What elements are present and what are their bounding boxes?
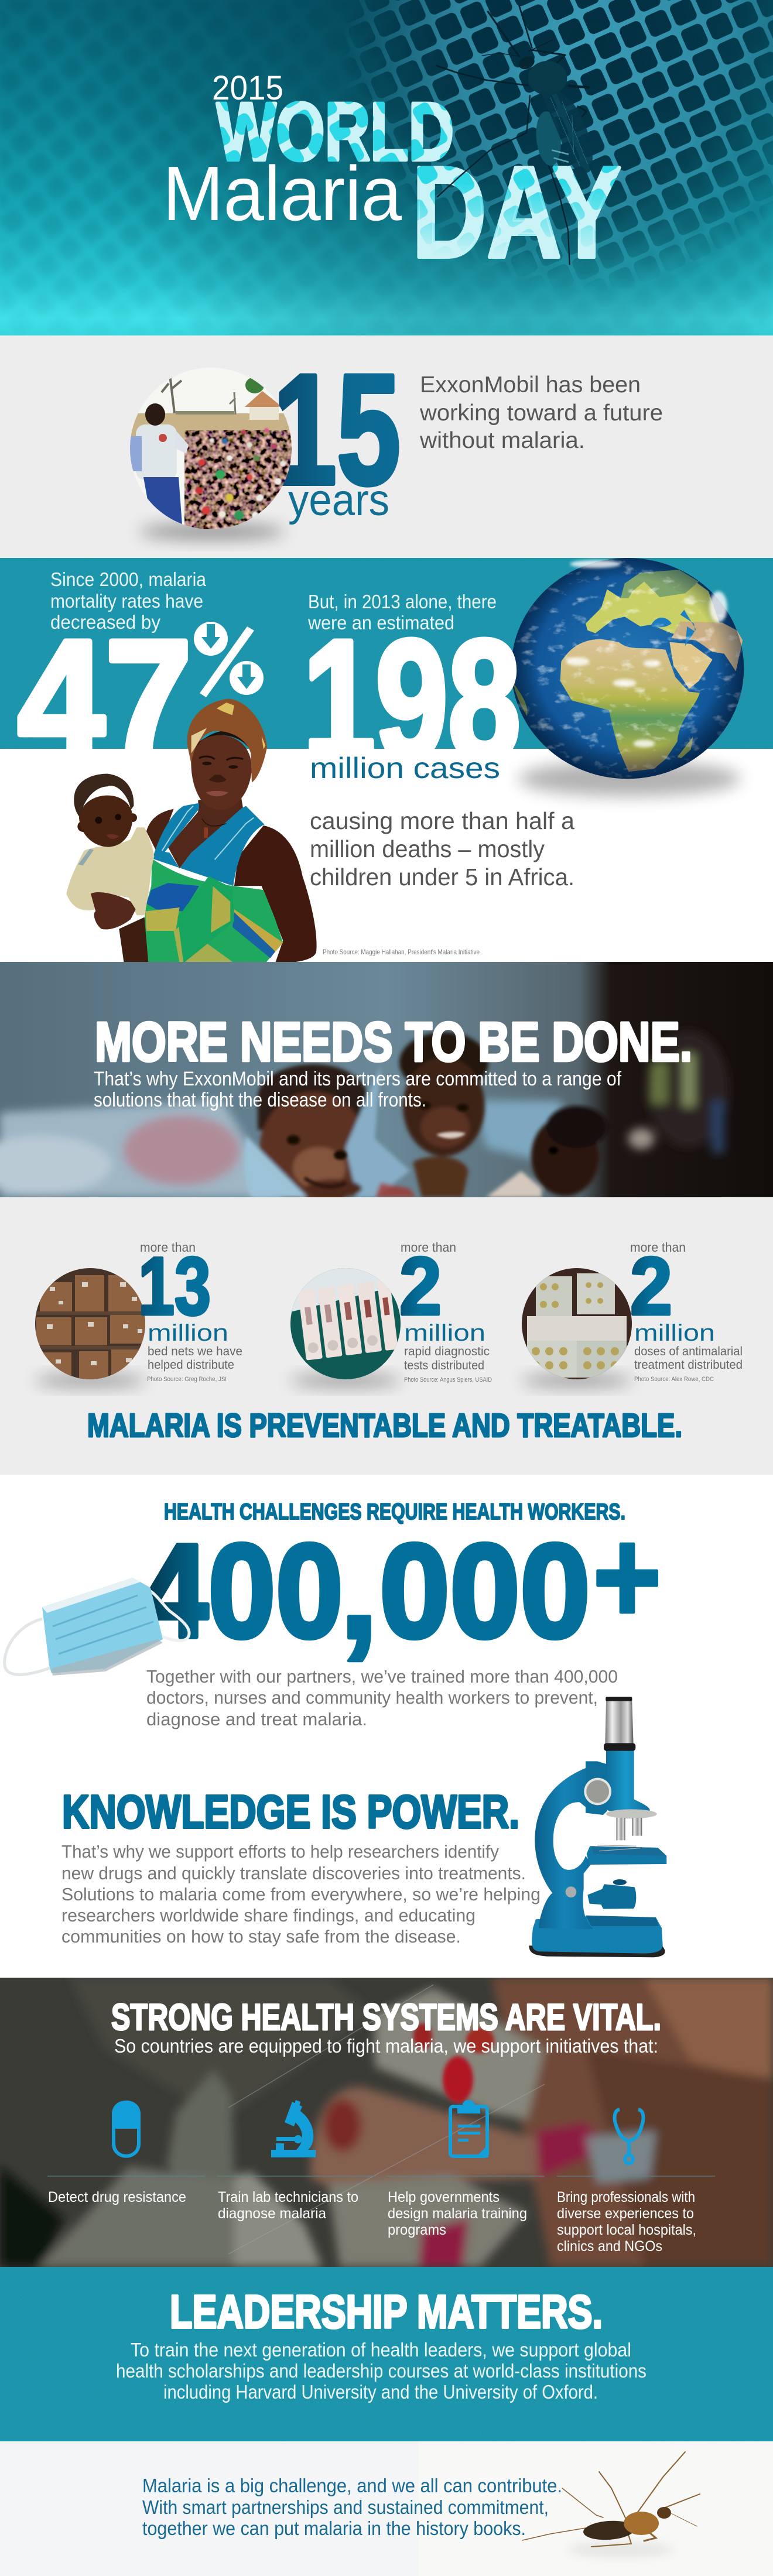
text: trained [146,1666,618,1729]
text: train lab technicians [218,2189,358,2222]
text: commitment: solutions that fight the disease on all fronts. [94,1089,426,1111]
icon: microscope [271,2100,316,2157]
label: years: years [288,475,389,525]
text: closing [142,2475,562,2539]
panel: closing message [0,2441,773,2576]
panel: more needs to be done photo [0,962,773,1209]
heading: DAY [417,166,621,259]
heading: LEADERSHIP MATTERS. [170,2286,603,2338]
panel: health workers and knowledge [0,1475,773,1978]
text: intro: working toward a future [419,400,663,426]
caption: Photo Source: Alex Rowe, CDC [634,1376,714,1383]
text: estimated: were an estimated [307,612,454,633]
number: 198: 198 [303,605,521,794]
panel: distribution stats [0,1197,773,1475]
number: 47 percent: 47 [18,605,192,794]
photo: test strips [290,1268,401,1380]
text: commitment [94,1068,621,1111]
illustration: mosquito on net [436,6,593,265]
text: mortality: decreased by [50,611,160,633]
panel: leadership matters [0,2267,773,2441]
label: million cases: million cases [310,752,500,785]
text: estimated: But, in 2013 alone, there [308,591,497,612]
number: 15: 15 [273,341,401,517]
caption: photo source: Photo Source: Maggie Hallahan, President's Malaria Initiative [323,948,480,956]
text: train lab technicians: diagnose malaria [218,2205,326,2222]
label: more than: more than [401,1240,456,1255]
icon: percent sign with down arrows [194,622,264,697]
text: trained: doctors, nurses and community health workers to prevent, [146,1687,598,1708]
number: 2: 2 [399,1240,442,1332]
text: tests [404,1345,490,1372]
text: deaths [310,807,574,890]
text: bed nets: bed nets we have [148,1345,242,1358]
text: research: That’s why we support efforts to help researchers identify [61,1841,499,1862]
label: more than: more than [140,1240,196,1255]
text: bring professionals [557,2189,696,2255]
heading: knowledge: KNOWLEDGE IS POWER. [62,1786,519,1838]
text: subtitle: So countries are equipped to fight malaria, we support initiatives that: [114,2035,658,2057]
text: detect drug resistance: Detect drug resistance [48,2189,186,2205]
number: 400,000+: , [338,1506,379,1669]
heading: health workers: HEALTH CHALLENGES REQUIRE HEALTH WORKERS. [164,1499,625,1525]
number: 2: 2 [630,1240,672,1332]
text: trained: diagnose and treat malaria. [146,1709,367,1729]
label: more than: more than [630,1240,686,1255]
number: 400,000+: + [593,1501,662,1652]
text: deaths: causing more than half a [310,807,574,834]
heading: DAY: DAY [412,140,621,285]
heading: WORLD: WORLD [217,85,454,177]
icon: stethoscope [615,2109,643,2163]
text: scholarships: including Harvard University and the University of Oxford. [163,2381,598,2403]
panel: hero banner [0,0,773,335]
text: intro: without malaria. [419,428,585,453]
photo: medicine packs [521,1268,632,1380]
text: intro: ExxonMobil has been [420,372,641,398]
text: closing: With smart partnerships and sustained commitment, [142,2496,549,2518]
stat: diagnostic tests [290,1240,492,1386]
text: help governments: design malaria training [388,2205,527,2222]
text: mortality [50,568,207,633]
text: doses [634,1345,743,1372]
text: mortality: Since 2000, malaria [50,568,207,590]
icon: clipboard [450,2100,488,2157]
text: research: new drugs and quickly translate discoveries into treatments. [61,1863,526,1883]
illustration: surgical mask [5,1578,189,1676]
text: train lab technicians: Train lab technicians to [218,2189,358,2205]
text: bring professionals: support local hospitals, [557,2222,696,2238]
photo: blood slide and gloved hands [0,1978,773,2267]
shadow: globe [518,761,741,796]
text: help governments [388,2189,527,2238]
text: doses: doses of antimalarial [634,1345,743,1358]
text: closing: Malaria is a big challenge, and we all can contribute. [142,2475,562,2496]
photo: mother and child [66,698,317,963]
text: research: Solutions to malaria come from everywhere, so we’re helping [61,1884,541,1904]
text: bring professionals: clinics and NGOs [557,2238,662,2255]
text: help governments: programs [388,2222,446,2238]
text: research [61,1841,541,1947]
photo: children under bed net [0,1030,729,1209]
text: tests: tests distributed [404,1359,484,1372]
text: scholarships: health scholarships and leadership courses at world-class institutions [116,2360,647,2382]
text: mortality: mortality rates have [50,590,203,612]
number: 400,000+: 000 [379,1517,590,1666]
panel: strong health systems photo [0,1978,773,2267]
panel: 15 years [0,335,773,558]
label: million: million [634,1320,715,1346]
text: scholarships: To train the next generation of health leaders, we support global [131,2339,631,2361]
number: 400,000+ [141,1501,662,1669]
text: bed nets: helped distribute [148,1358,234,1372]
text: trained: Together with our partners, we’ve trained more than 400,000 [146,1666,618,1687]
number: 400,000+: 400 [141,1517,343,1666]
illustration: brown mosquito [522,2452,700,2558]
label: million: million [404,1320,485,1346]
text: commitment: That’s why ExxonMobil and its partners are committed to a range of [94,1068,621,1090]
stat: bed nets [35,1240,242,1386]
text: closing: together we can put malaria in the history books. [142,2517,526,2539]
text: deaths: million deaths – mostly [310,835,545,862]
text: estimated [307,591,497,633]
photo: stacked boxes [35,1268,146,1381]
text: bring professionals: Bring professionals with [557,2189,695,2205]
text: bed nets [148,1345,242,1372]
text: deaths: children under 5 in Africa. [310,864,574,890]
number: 13: 13 [138,1240,211,1332]
stat: antimalarial doses [521,1240,743,1386]
heading: Malaria: Malaria [163,150,402,237]
text: help governments: Help governments [388,2189,500,2205]
text: doses: treatment distributed [634,1358,743,1372]
label: million: million [148,1320,228,1346]
photo: crowd of children [129,366,293,533]
caption: Photo Source: Greg Roche, JSI [147,1376,227,1383]
heading: 2015: 2015 [212,69,283,107]
text: research: researchers worldwide share findings, and educating [61,1905,476,1926]
text: tests: rapid diagnostic [404,1345,490,1358]
text: intro [419,372,663,453]
panel: statistics teal band [0,556,773,963]
caption: Photo Source: Angus Spiers, USAID [404,1376,492,1383]
heading: DAY: DAY [412,140,621,285]
text: bring professionals: diverse experiences to [557,2205,694,2222]
illustration: blue microscope [529,1697,666,1957]
illustration: globe [504,556,754,780]
text: scholarships [116,2339,647,2403]
icon: capsule [112,2101,141,2156]
text: research: communities on how to stay safe from the disease. [61,1926,461,1947]
